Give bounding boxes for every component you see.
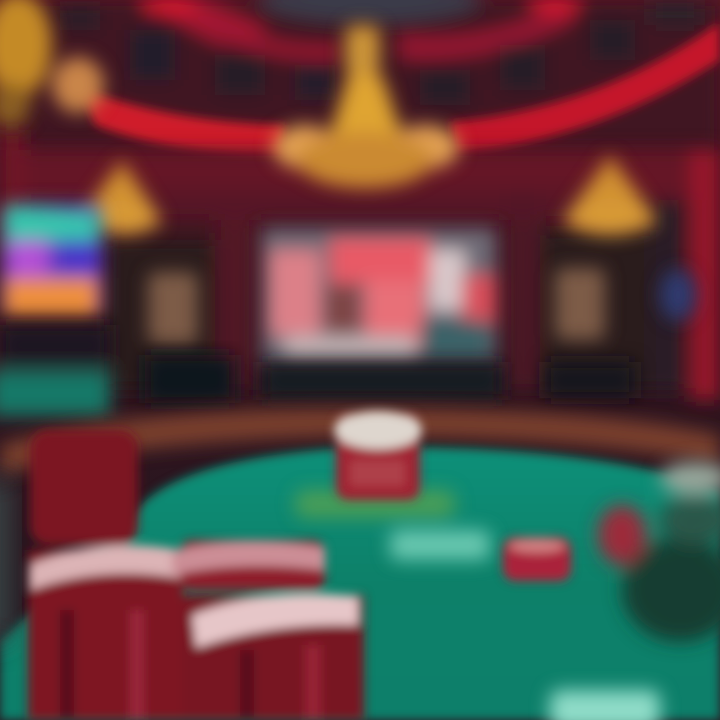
side wall pictures [148,268,696,344]
green felt table [0,447,720,720]
chandelier: centre [273,25,459,188]
red swag band [80,22,720,158]
ceiling: dark patterned dome [0,0,720,150]
felt markings [295,490,660,720]
centre wall screen [262,228,497,364]
chandelier: top left [0,0,104,127]
right chip stacks [598,462,720,642]
wall panels and columns [0,130,720,400]
left edge shadow [0,480,10,640]
left side table [0,325,110,416]
lantern: right [562,155,658,235]
lantern: left [80,160,162,234]
red chip on felt [503,537,571,581]
left colourful screen [2,204,102,316]
table rim [0,408,720,475]
dark cabinets under the screen [145,355,635,403]
red and white chip stacks, lower left [28,430,364,720]
centre chip cup [334,411,422,500]
